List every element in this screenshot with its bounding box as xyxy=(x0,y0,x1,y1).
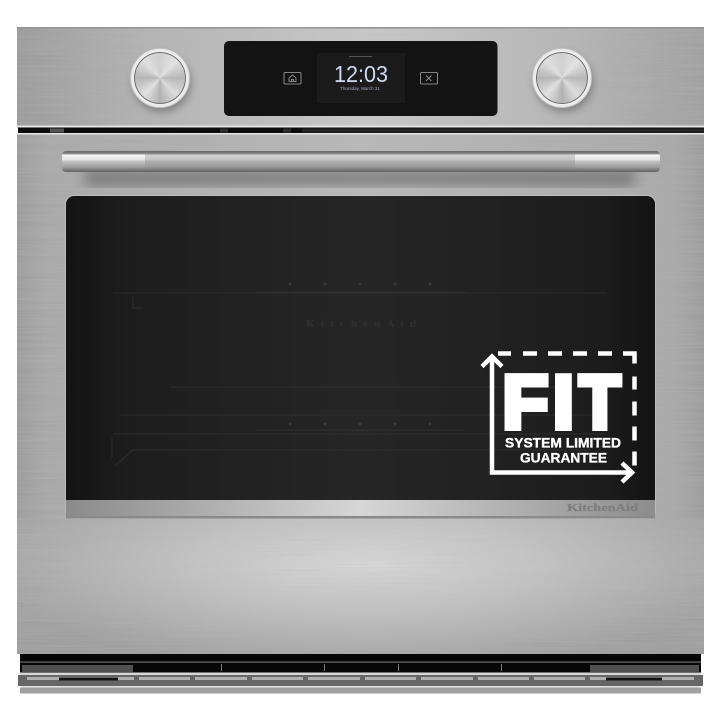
badge: FIT system limited guarantee xyxy=(482,354,634,482)
gap between panel and door xyxy=(18,128,704,134)
FIT wordmark: T xyxy=(579,361,621,445)
control panel xyxy=(17,27,704,128)
oven window xyxy=(65,195,656,519)
date: Thursday, March 31 xyxy=(340,86,380,91)
left knob xyxy=(131,49,189,107)
clock time: 12:03 xyxy=(334,61,388,87)
bottom trim strip xyxy=(66,500,655,518)
icon: close xyxy=(420,72,438,84)
rack dots xyxy=(288,282,432,426)
dashed frame xyxy=(498,354,634,466)
guarantee line 2: GUARANTEE xyxy=(520,450,607,466)
brand name: KitchenAid xyxy=(567,502,638,514)
arrows xyxy=(482,356,632,482)
door handle xyxy=(62,151,660,172)
display panel xyxy=(224,41,498,116)
right knob xyxy=(533,49,591,107)
FIT wordmark: I xyxy=(553,360,574,444)
bottom vent xyxy=(18,654,703,694)
guarantee line 1: SYSTEM LIMITED xyxy=(505,434,621,450)
rack reflections xyxy=(112,292,607,466)
reflected brand name: KitchenAid xyxy=(306,318,416,330)
FIT wordmark: F xyxy=(502,360,548,444)
oven door xyxy=(17,133,704,654)
FIT wordmark xyxy=(502,360,621,445)
handle shadow xyxy=(85,170,635,186)
icon: home xyxy=(284,72,301,84)
